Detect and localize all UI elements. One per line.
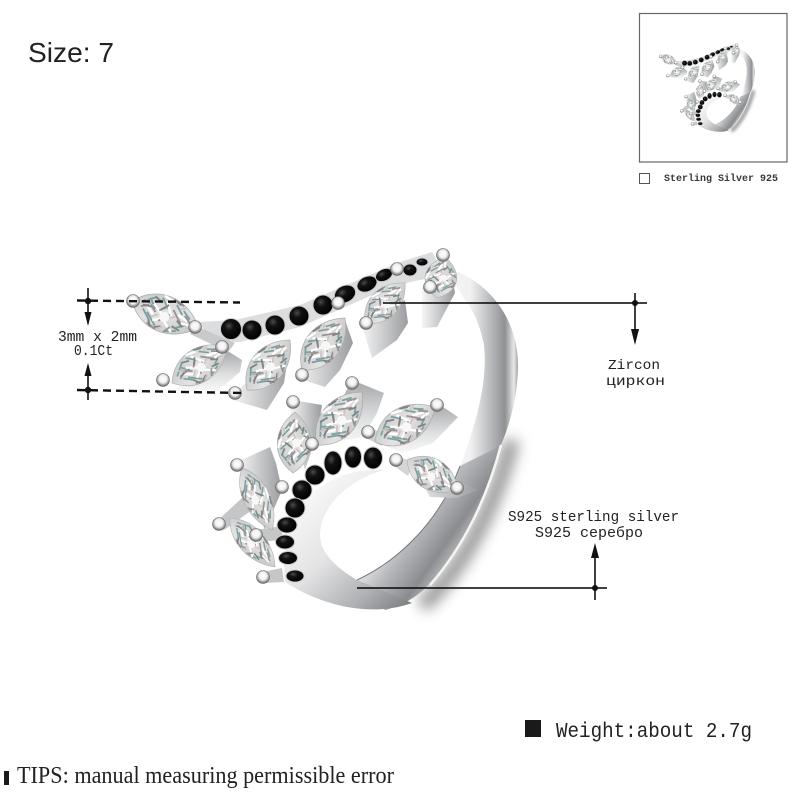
callout text: sterling silver xyxy=(508,509,679,542)
dimension label xyxy=(58,329,137,360)
dimension marker: stone size arrows and dashed guides xyxy=(77,288,242,400)
title: size label: Size: 7 xyxy=(28,37,114,68)
black spinel stones: upper row xyxy=(220,258,428,340)
upper branch metal xyxy=(199,252,445,342)
callout line: zircon xyxy=(383,293,647,345)
tips marker xyxy=(4,771,9,785)
lower zircon leaves xyxy=(221,381,466,576)
thumbnail checkbox xyxy=(640,174,650,184)
ring band: back section xyxy=(445,268,518,468)
upper zircon leaves xyxy=(125,254,461,401)
callout text: sterling silver: S925 sterling silver xyxy=(508,509,679,526)
ring shadow xyxy=(422,440,512,606)
ring illustration xyxy=(125,248,518,610)
weight text: Weight:about 2.7g xyxy=(556,721,752,744)
dimension label: 0.1Ct xyxy=(74,343,113,360)
callout text: zircon: Zircon xyxy=(608,358,660,374)
weight marker xyxy=(525,720,541,737)
callout text: zircon xyxy=(606,358,665,390)
panel: thumbnail of ring xyxy=(640,14,787,162)
thumbnail caption: Sterling Silver 925 xyxy=(664,173,778,185)
upper leaf seats xyxy=(177,262,455,410)
lower leaf seats xyxy=(216,380,478,583)
tips text: TIPS: manual measuring permissible error xyxy=(17,763,394,789)
callout text: sterling silver: S925 серебро xyxy=(535,525,643,542)
callout text: zircon: циркон xyxy=(606,374,665,390)
black spinel stones: lower row xyxy=(276,446,382,582)
callout line: sterling silver xyxy=(357,543,607,600)
prongs xyxy=(126,248,464,584)
dimension label: 3mm x 2mm xyxy=(58,329,137,346)
ring band: lower inner surface xyxy=(357,446,500,610)
ring band: front hook xyxy=(284,470,412,609)
